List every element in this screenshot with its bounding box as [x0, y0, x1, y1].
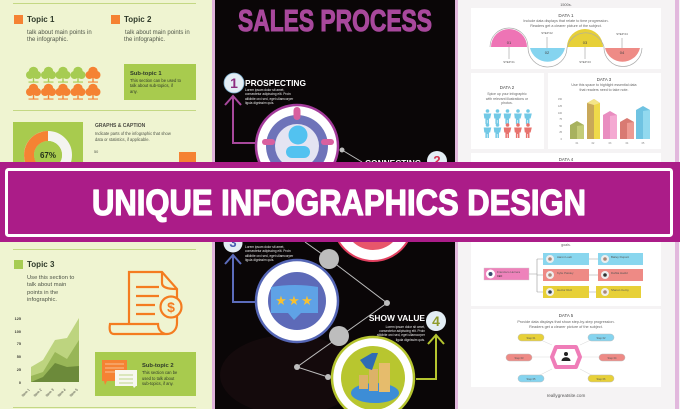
card: data 1: STEP 01: [503, 60, 515, 64]
callout: sub-topic 2: This section can be: [142, 370, 178, 375]
icon: tree pictogram: [26, 67, 100, 100]
card: data 3: 125: [558, 105, 563, 108]
step 1: prospecting: PROSPECTING: [245, 78, 306, 88]
card: data 1: Readers get a clearer picture of the subject.: [530, 24, 602, 28]
title: SALES PROCESS: [238, 3, 432, 38]
card: data 2: with relevant illustrations or: [486, 97, 529, 101]
chart: donut 67%: [13, 122, 83, 174]
callout: sub-topic 1: Sub-topic 1: [130, 71, 162, 77]
card: data 3: 75: [559, 118, 563, 121]
chart: stacked area: 25: [17, 368, 21, 372]
chart: stacked area: Item 2: [33, 388, 43, 398]
card: data 2: DATA 2: [500, 85, 515, 90]
step 3: quality: ligula dignissim quis.: [245, 258, 274, 262]
card: data 3: Use this space to highlight essential data: [571, 83, 637, 87]
text: graphs and caption: Indicate parts of the infographic that show: [95, 131, 171, 136]
step 1: prospecting: alikibite orci sed, eget ullamcorper: [245, 97, 294, 101]
topic 3: points in the: [27, 290, 58, 296]
step 4: show value: [332, 311, 446, 409]
topic 1: the infographic.: [27, 37, 68, 43]
step 4: show value: Lorem ipsum dolor sit amet,: [386, 325, 425, 329]
org chart nodes: managers and staff: Sharon Cerny: [611, 288, 629, 292]
panel: left green infographic: [0, 0, 215, 409]
step 1: prospecting: Lorem ipsum dolor sit amet,: [245, 88, 284, 92]
text: graphs and caption: data or statistics, if applicable.: [95, 137, 150, 142]
card: data 5 hexagon diagram: [471, 309, 661, 387]
step 4: show value: 4: [432, 313, 440, 329]
card: data 5 hexagon diagram: DATA 5: [559, 313, 574, 318]
chart: donut 67%: 67%: [40, 151, 56, 160]
card: data 4 org chart: goals.: [561, 243, 571, 247]
card: data 3: 03: [609, 142, 612, 145]
card: data 1: DATA 1: [558, 13, 574, 18]
card: data 3: 02: [592, 142, 595, 145]
topic 3: Use this section to: [27, 275, 74, 281]
card: data 1: 02: [545, 50, 550, 55]
step 4: show value: consectetur adipiscing elit. Proin: [379, 329, 425, 333]
panel: right data infographic: [455, 0, 680, 409]
text: graphs and caption: 50: [94, 150, 98, 154]
chart: stacked area: Item 3: [45, 388, 55, 398]
topic 1: Topic 1: [27, 15, 55, 24]
card: data 1: STEP 02: [541, 31, 553, 35]
card: data 3: DATA 3: [597, 77, 612, 82]
org chart nodes: managers and staff: Dahlia Hadid: [611, 271, 628, 275]
org chart node: CEO: [484, 268, 529, 280]
org chart nodes: managers and staff: Aaron Loeb: [557, 255, 572, 259]
card: data 1: Include data displays that relate to time progression.: [523, 19, 609, 23]
banner heading: UNIQUE INFOGRAPHICS DESIGN: [92, 182, 586, 223]
step 3: quality: 3: [229, 235, 237, 250]
topic 2: [111, 15, 190, 43]
callout: sub-topic 2: Sub-topic 2: [142, 363, 174, 369]
org chart node: CEO: Francisco Herrera: [497, 270, 521, 274]
topic 1: [14, 15, 92, 43]
org chart node: CEO: CEO: [497, 275, 502, 278]
card: data 3: 0: [561, 138, 563, 141]
callout: sub-topic 2: [95, 352, 196, 396]
panel: sales process dark infographic: [215, 0, 455, 409]
card: data 5 hexagon diagram: Step 01: [527, 336, 536, 340]
icon: invoice document with dollar: [110, 272, 182, 334]
topic 2: Topic 2: [124, 15, 152, 24]
step 4: show value: SHOW VALUE: [369, 313, 425, 323]
card: data 5 hexagon diagram: Readers get a clearer picture of the subject.: [529, 325, 603, 329]
callout: sub-topic 2: used to talk about: [142, 376, 175, 381]
topic 3: Topic 3: [27, 260, 55, 269]
card: data 3: 150: [558, 98, 563, 101]
card: data 5 hexagon diagram: Step 06: [597, 377, 606, 381]
card: data 5 hexagon diagram: Step 04: [608, 356, 617, 360]
chart: stacked area: 100: [15, 330, 21, 334]
card: data 5 hexagon diagram: Step 03: [515, 356, 524, 360]
callout: sub-topic 1: This section can be used to: [130, 78, 182, 83]
callout: sub-topic 1: talk about sub-topics, if: [130, 83, 174, 88]
card: data 2: Spice up your infographic: [487, 92, 527, 96]
step 1: prospecting: consectetur adipiscing elit. Proin: [245, 92, 291, 96]
icon: invoice document with dollar: $: [167, 299, 175, 315]
chart: stacked area: 50: [17, 355, 21, 359]
card: data 5 hexagon diagram: Step 05: [527, 377, 536, 381]
card: data 3: 50: [559, 125, 563, 128]
step 3: quality: Lorem ipsum dolor sit amet,: [245, 245, 284, 249]
step 4: show value: ligula dignissim quis.: [396, 338, 425, 342]
topic 1: talk about main points in: [27, 30, 92, 36]
step 2: connecting: 2: [433, 153, 441, 168]
text: graphs and caption: GRAPHS & CAPTION: [95, 123, 146, 129]
callout: sub-topic 1: [124, 64, 196, 100]
card: data 3: 04: [626, 142, 629, 145]
card: data 3: 100: [558, 112, 563, 115]
callout: sub-topic 2: sub-topics, if any.: [142, 381, 174, 386]
card: data 1: STEP 04: [616, 32, 628, 36]
topic 3: talk about main: [27, 282, 66, 288]
step 2: connecting: CONNECTING: [365, 158, 421, 168]
org chart nodes: managers and staff: [543, 253, 643, 298]
org chart nodes: managers and staff: Kylie Paisley: [557, 271, 574, 275]
panel: right data infographic: 1500s.: [560, 3, 572, 7]
card: data 2: photos.: [501, 101, 513, 105]
topic 3: [14, 260, 74, 303]
chart: stacked area: Item 1: [21, 388, 31, 398]
step 3: quality: ★: [301, 293, 313, 308]
card: data 5 hexagon diagram: Provide data displays that show step-by-step progression.: [517, 320, 615, 324]
step 1: prospecting: ligula dignissim quis.: [245, 101, 274, 105]
org chart nodes: managers and staff: Bailey Dupont: [611, 255, 629, 259]
step: red node: [333, 181, 413, 261]
step 3: quality: ★: [288, 293, 300, 308]
icon: speech bubbles: [102, 360, 137, 388]
card: data 1: 04: [620, 50, 625, 55]
topic 3: infographic.: [27, 297, 57, 303]
text: graphs and caption: [94, 123, 196, 166]
step 3: quality: alikibite orci sed, eget ullamcorper: [245, 254, 294, 258]
connector lines: [294, 148, 390, 380]
step 1: prospecting: [224, 73, 338, 187]
card: data 3: 05: [642, 142, 645, 145]
card: data 2: [471, 73, 544, 149]
step 2: connecting: [365, 151, 447, 171]
callout: sub-topic 1: any.: [130, 89, 138, 94]
card: data 4 org chart: [471, 153, 661, 306]
topic 2: the infographic.: [124, 37, 165, 43]
card: data 4 org chart: DATA 4: [559, 157, 574, 162]
chart: stacked area: 0: [19, 381, 21, 385]
org chart nodes: managers and staff: Hector Ruiz: [557, 288, 573, 292]
chart: stacked area: 75: [17, 342, 21, 346]
card: data 5 hexagon diagram: Step 02: [597, 336, 606, 340]
step 3: quality: consectetur adipiscing elit. Proin: [245, 249, 291, 253]
chart: stacked area: [15, 317, 79, 398]
card: data 1: STEP 03: [579, 60, 591, 64]
card: data 3: [548, 73, 661, 149]
footer url: reallygreatsite.com: [547, 393, 585, 398]
card: data 3: that readers need to take note.: [580, 88, 628, 92]
chart: stacked area: Item 5: [69, 388, 79, 398]
chart: stacked area: 125: [15, 317, 21, 321]
step 4: show value: alikibite orci sed, eget ullamcorper: [377, 333, 426, 337]
topic 2: talk about main points in: [125, 30, 190, 36]
card: data 3: 01: [576, 142, 579, 145]
step 3: quality: ★: [275, 293, 287, 308]
card: data 1: 01: [507, 40, 512, 45]
step 1: prospecting: 1: [230, 75, 238, 91]
chart: stacked area: Item 4: [57, 388, 67, 398]
step 3: quality: [224, 234, 338, 342]
banner: [0, 162, 680, 242]
card: data 1: [471, 8, 661, 69]
card: data 3: 25: [559, 131, 563, 134]
card: data 1: 03: [583, 40, 588, 45]
